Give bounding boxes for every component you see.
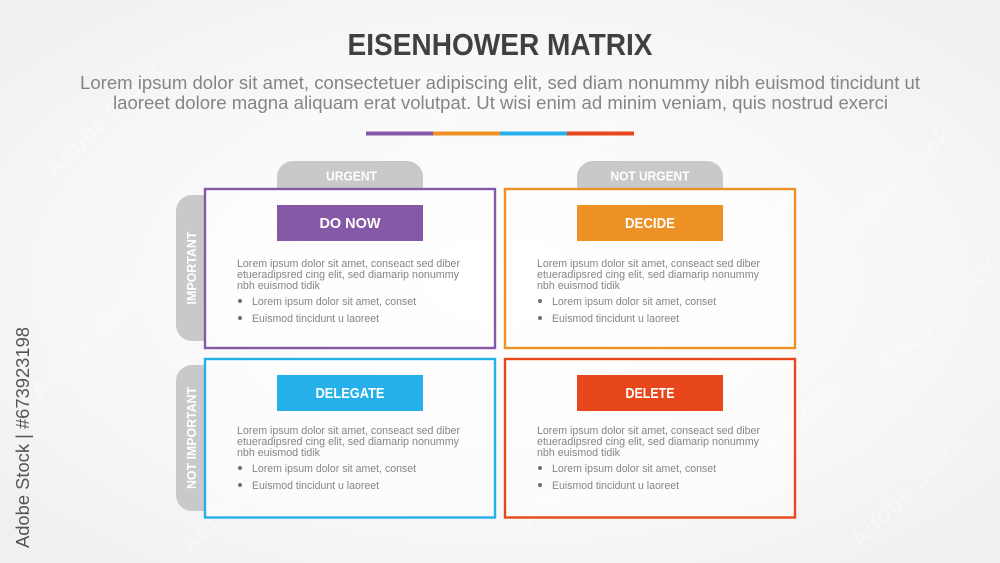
- watermark pattern: Adobe Stock: [714, 376, 842, 504]
- subtitle: [80, 72, 920, 113]
- bullet list: Euismod tincidunt u laoreet: [552, 480, 680, 492]
- watermark pattern: Adobe Stock: [344, 306, 472, 434]
- watermark pattern: Adobe Stock: [874, 251, 1000, 379]
- description: nbh euismod tidik: [537, 447, 620, 459]
- watermark pattern: Adobe Stock: [194, 176, 322, 304]
- description: etueradipsred cing elit, sed diamarip nonummy: [537, 269, 759, 281]
- tab: not urgent: NOT URGENT: [610, 168, 690, 184]
- tab: important: [176, 195, 206, 341]
- description: nbh euismod tidik: [237, 447, 320, 459]
- watermark pattern: Adobe Stock: [684, 176, 812, 304]
- description: nbh euismod tidik: [537, 280, 620, 292]
- button: decide: DECIDE: [625, 215, 675, 232]
- button: do now: [277, 205, 423, 241]
- watermark pattern: Adobe Stock: [24, 276, 152, 404]
- description: Lorem ipsum dolor sit amet, conseact sed diber: [537, 425, 760, 437]
- description: [237, 258, 460, 292]
- bullet list: Lorem ipsum dolor sit amet, conset: [552, 463, 717, 475]
- button: delete: [577, 375, 723, 411]
- description: etueradipsred cing elit, sed diamarip nonummy: [237, 269, 459, 281]
- watermark pattern: Adobe Stock: [514, 406, 642, 534]
- bullet list: Euismod tincidunt u laoreet: [552, 313, 680, 325]
- tab: urgent: [277, 161, 423, 190]
- description: [537, 258, 760, 292]
- button: do now: DO NOW: [320, 215, 381, 232]
- watermark pattern: Adobe Stock: [369, 66, 497, 194]
- description: Lorem ipsum dolor sit amet, conseact sed diber: [237, 258, 460, 270]
- bullet list: Euismod tincidunt u laoreet: [252, 480, 380, 492]
- subtitle: Lorem ipsum dolor sit amet, consectetuer adipiscing elit, sed diam nonummy nibh euismod tincidunt ut: [80, 72, 920, 93]
- description: nbh euismod tidik: [237, 280, 320, 292]
- watermark pattern: Adobe Stock: [499, 111, 627, 239]
- tab: not important: [176, 365, 206, 511]
- watermark pattern: Adobe Stock: [39, 56, 167, 184]
- watermark pattern: Adobe Stock: [844, 426, 972, 554]
- subtitle: laoreet dolore magna aliquam erat volutpat. Ut wisi enim ad minim veniam, quis nostrud exerci: [113, 92, 888, 113]
- tab: urgent: URGENT: [326, 168, 377, 184]
- bullet list: Euismod tincidunt u laoreet: [252, 313, 380, 325]
- tab: not urgent: [577, 161, 723, 190]
- description: Lorem ipsum dolor sit amet, conseact sed diber: [237, 425, 460, 437]
- tab: important: IMPORTANT: [184, 231, 199, 304]
- bullet list: Lorem ipsum dolor sit amet, conset: [252, 296, 417, 308]
- stock id side text: Adobe Stock | #673923198: [13, 327, 33, 548]
- tab: not important: NOT IMPORTANT: [184, 387, 199, 489]
- panel: delegate: [205, 359, 495, 518]
- panel: decide: [505, 189, 795, 348]
- button: delegate: DELEGATE: [316, 385, 384, 402]
- bullet list: [538, 296, 717, 325]
- description: etueradipsred cing elit, sed diamarip nonummy: [537, 436, 759, 448]
- button: delegate: [277, 375, 423, 411]
- description: [537, 425, 760, 459]
- panel: do now: [205, 189, 495, 348]
- bullet list: Lorem ipsum dolor sit amet, conset: [552, 296, 717, 308]
- panel: delete: [505, 359, 795, 518]
- description: etueradipsred cing elit, sed diamarip nonummy: [237, 436, 459, 448]
- description: Lorem ipsum dolor sit amet, conseact sed diber: [537, 258, 760, 270]
- watermark pattern: Adobe Stock: [174, 431, 302, 559]
- bullet list: [238, 463, 417, 492]
- watermark pattern: Adobe Stock: [829, 121, 957, 249]
- description: [237, 425, 460, 459]
- bullet list: [538, 463, 717, 492]
- bullet list: Lorem ipsum dolor sit amet, conset: [252, 463, 417, 475]
- button: delete: DELETE: [626, 385, 674, 402]
- button: decide: [577, 205, 723, 241]
- bullet list: [238, 296, 417, 325]
- title: EISENHOWER MATRIX: [348, 27, 653, 62]
- colored divider bar: [366, 132, 634, 136]
